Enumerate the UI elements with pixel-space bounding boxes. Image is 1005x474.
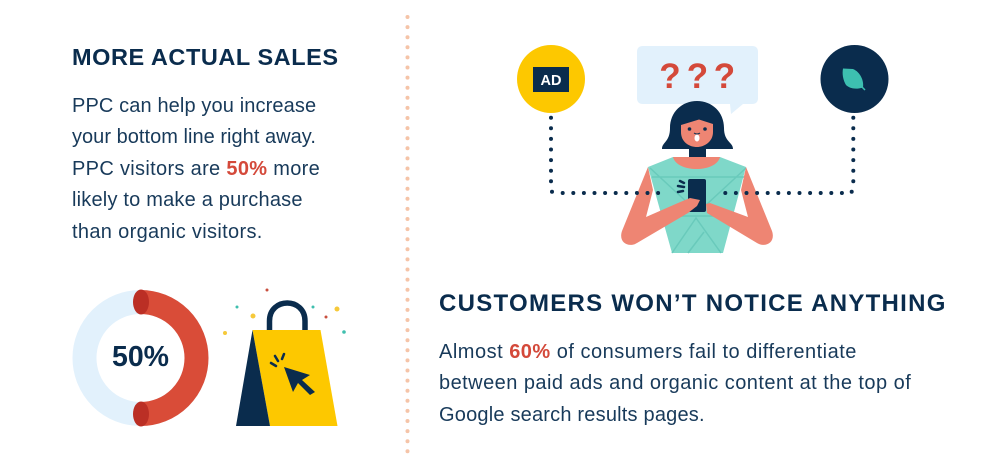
text block: consumers: Almost 60% of consumers fail to differentiate <box>439 341 857 363</box>
face <box>681 120 713 147</box>
speech bubble with question marks: ? <box>687 57 708 96</box>
heading: customers won't notice anything: CUSTOMERS WON’T NOTICE ANYTHING <box>439 290 947 317</box>
text block: consumers: Google search results pages. <box>439 404 705 426</box>
text block: consumers: between paid ads and organic content at the top of <box>439 372 911 394</box>
speech bubble with question marks: ? <box>659 57 681 96</box>
icon: AD circle <box>517 45 585 113</box>
text block: PPC sales: your bottom line right away. <box>72 126 316 148</box>
icon: shopping bag with cursor <box>223 288 346 426</box>
donut label: 50% <box>112 341 169 373</box>
chart: 50% donut <box>84 290 197 426</box>
arms <box>621 167 700 245</box>
text block: PPC sales: than organic visitors. <box>72 221 263 243</box>
text block: PPC sales: likely to make a purchase <box>72 189 303 211</box>
text block: consumers <box>439 341 911 426</box>
top <box>648 157 746 253</box>
phone <box>688 179 706 212</box>
text block: PPC sales: PPC visitors are 50% more <box>72 158 320 180</box>
icon: leaf circle <box>820 45 888 113</box>
heading: more actual sales: MORE ACTUAL SALES <box>72 44 339 70</box>
speech bubble with question marks: ? <box>714 57 735 96</box>
illustration: woman with phone <box>621 101 773 253</box>
divider: dotted vertical line <box>406 17 410 460</box>
neck <box>689 146 706 158</box>
notification ticks <box>678 181 684 192</box>
text block: PPC sales: PPC can help you increase <box>72 95 316 117</box>
hair <box>662 101 733 149</box>
icon: AD circle: AD <box>541 73 561 89</box>
speech bubble with question marks <box>637 46 758 114</box>
text block: PPC sales <box>72 95 320 243</box>
connector: dotted lines <box>551 118 853 193</box>
